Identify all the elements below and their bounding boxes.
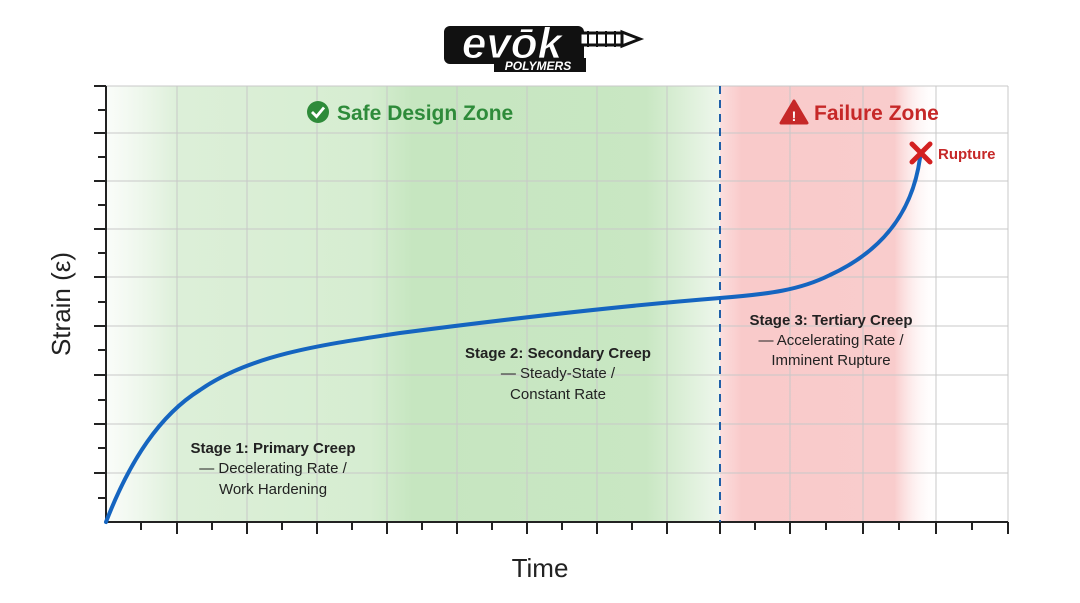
logo	[444, 19, 640, 73]
heading: failure zone: !	[792, 108, 796, 124]
creep curve	[106, 158, 920, 522]
label: stage 1: Work Hardening	[219, 481, 327, 498]
label: stage 2: Constant Rate	[510, 386, 606, 403]
label: stage 3: Imminent Rupture	[771, 352, 891, 369]
logo: POLYMERS	[505, 59, 571, 73]
label: stage 2	[465, 345, 651, 403]
label: stage 1: Stage 1: Primary Creep	[190, 440, 356, 457]
label: stage 1	[190, 440, 356, 498]
axis label: time: Time	[512, 553, 568, 583]
rupture marker	[912, 144, 996, 163]
label: stage 1: — Decelerating Rate /	[199, 460, 348, 477]
label: stage 2: Stage 2: Secondary Creep	[465, 345, 651, 362]
label: stage 2: — Steady-State /	[501, 365, 616, 382]
heading: safe design zone: Safe Design Zone	[337, 102, 513, 125]
label: stage 3: — Accelerating Rate /	[758, 332, 904, 349]
logo: evōk	[462, 19, 565, 68]
axes	[94, 86, 1008, 534]
zone: failure background	[720, 86, 938, 522]
axis label: strain: Strain (ε)	[46, 252, 76, 356]
label: stage 3	[749, 312, 913, 369]
divider: dashed boundary	[719, 86, 721, 522]
label: stage 3: Stage 3: Tertiary Creep	[749, 312, 913, 329]
zone: safe background	[106, 86, 720, 522]
heading: failure zone: Failure Zone	[814, 102, 939, 125]
rupture marker: Rupture	[938, 146, 996, 163]
